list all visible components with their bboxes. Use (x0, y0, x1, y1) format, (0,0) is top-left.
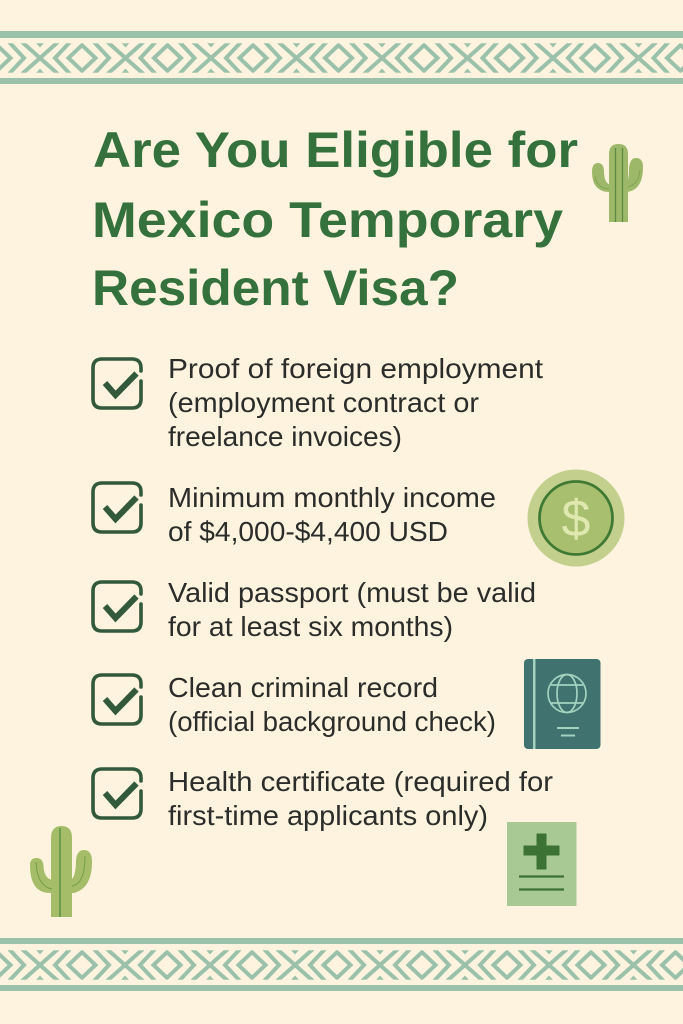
icon: cactus bottom left (30, 826, 92, 917)
title: Are You Eligible for (93, 122, 578, 178)
item 4: criminal record (93, 672, 496, 737)
text: foreign employment: (employment contract or (168, 387, 479, 418)
icon: checkbox 4 (93, 675, 141, 724)
text: passport (168, 577, 536, 642)
top decorative border (0, 31, 683, 84)
text: foreign employment: Proof of foreign employment (168, 353, 543, 384)
text: passport: for at least six months) (168, 611, 453, 642)
icon: dollar coin: $ (562, 490, 591, 548)
bottom decorative border (0, 938, 683, 991)
text: criminal record (168, 672, 496, 737)
text: monthly income (168, 482, 496, 547)
text: monthly income: Minimum monthly income (168, 482, 496, 513)
icon: checkbox 1 (93, 359, 141, 408)
title (92, 122, 578, 316)
item 1: foreign employment (93, 353, 543, 452)
text: foreign employment: freelance invoices) (168, 421, 402, 452)
icon: health certificate document (507, 822, 576, 906)
text: health certificate (168, 766, 553, 831)
icon: dollar coin (528, 470, 624, 566)
icon: passport (524, 659, 600, 749)
title: Resident Visa? (92, 260, 459, 316)
text: passport: Valid passport (must be valid (168, 577, 536, 608)
item 3: passport (93, 577, 536, 642)
text: monthly income: of $4,000-$4,400 USD (168, 516, 448, 547)
title: Mexico Temporary (92, 192, 563, 248)
icon: cactus top right (592, 144, 643, 222)
item 5: health certificate (93, 766, 553, 831)
text: criminal record: (official background check) (168, 706, 496, 737)
item 2: monthly income (93, 482, 496, 547)
text: foreign employment (168, 353, 543, 452)
icon: checkbox 3 (93, 582, 141, 631)
icon: checkbox 2 (93, 483, 141, 532)
text: health certificate: first-time applicants only) (168, 800, 488, 831)
icon: checkbox 5 (93, 769, 141, 818)
text: criminal record: Clean criminal record (168, 672, 438, 703)
text: health certificate: Health certificate (required for (168, 766, 553, 797)
